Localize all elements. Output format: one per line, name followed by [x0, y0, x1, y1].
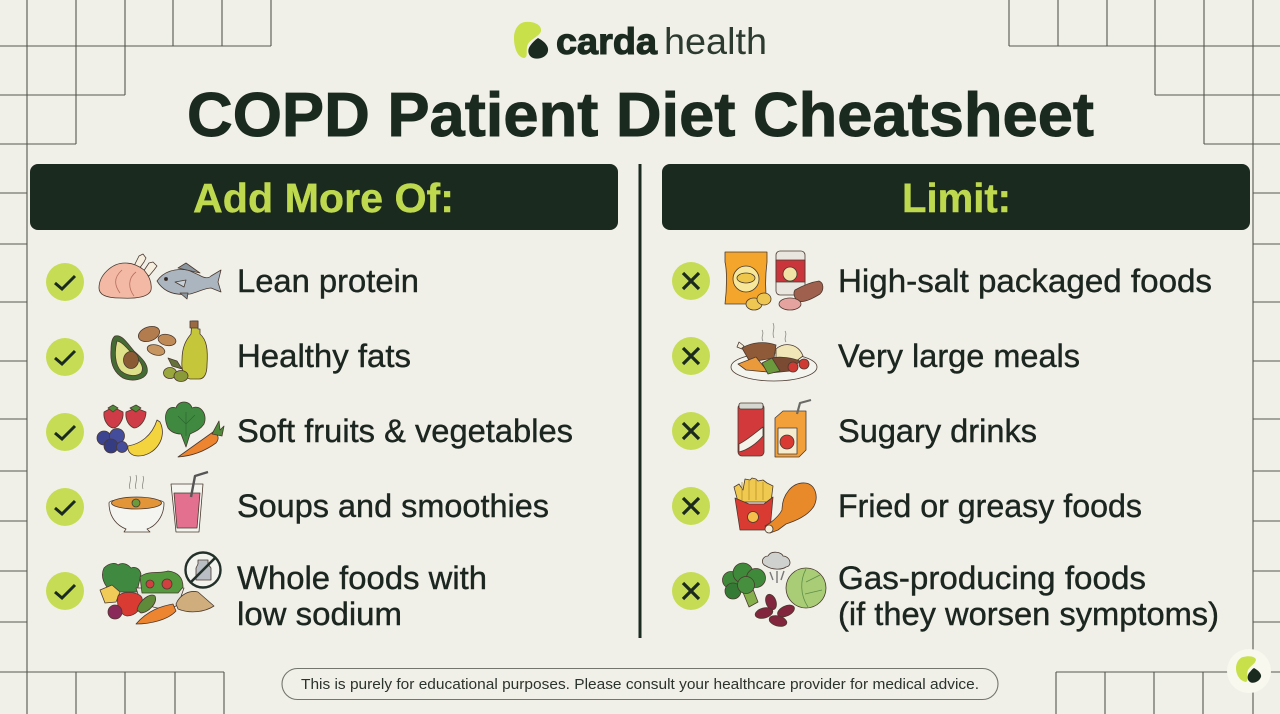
row: lean protein: Lean protein — [237, 263, 419, 299]
panel: limit — [672, 251, 1219, 632]
text: gas-producing foods: Gas-producing foods — [838, 560, 1146, 596]
center divider — [638, 164, 642, 638]
panel header: Limit — [662, 164, 1250, 230]
icon: broccoli, gas cloud, cabbage and beans — [722, 552, 826, 628]
row: soups and smoothies — [46, 472, 549, 532]
row: sugary drinks — [672, 400, 1037, 457]
corner logo — [1227, 649, 1271, 693]
icon: soup and smoothie — [109, 472, 208, 532]
row: fried or greasy foods: Fried or greasy foods — [838, 488, 1142, 524]
row: high-salt packaged foods — [672, 251, 1212, 310]
panel header: Add More Of — [30, 164, 618, 230]
text: gas-producing foods — [838, 560, 1219, 632]
row: fried or greasy foods — [672, 478, 1142, 533]
logo: carda health: carda — [556, 21, 657, 62]
row: soft fruits and vegetables: Soft fruits & vegetables — [237, 413, 573, 449]
row: sugary drinks: Sugary drinks — [838, 413, 1037, 449]
footer disclaimer: This is purely for educational purposes. Please consult your healthcare provider for medical advice. — [301, 676, 979, 693]
text: whole foods with low sodium: low sodium — [237, 596, 402, 632]
footer disclaimer — [282, 668, 998, 700]
row: very large meals — [672, 323, 1080, 381]
row: lean protein — [46, 254, 419, 301]
panel: add more of — [46, 254, 573, 632]
icon: soda can and juice box — [738, 400, 811, 457]
icon: large plate of food — [731, 323, 817, 381]
logo: carda health: health — [664, 21, 767, 62]
icon: chips, canned soup and sausage — [725, 251, 823, 310]
row: healthy fats — [46, 321, 411, 382]
icon: berries, banana, spinach and carrot — [97, 402, 224, 457]
panel header: Add More Of: Add More Of: — [193, 175, 454, 221]
row: healthy fats: Healthy fats — [237, 338, 411, 374]
icon: chicken and fish — [99, 254, 221, 299]
row: gas-producing foods — [672, 552, 1219, 632]
row: very large meals: Very large meals — [838, 338, 1080, 374]
title: COPD Patient Diet Cheatsheet — [187, 81, 1094, 150]
icon: fries and fried drumstick — [734, 478, 816, 533]
text: gas-producing foods: (if they worsen symptoms) — [838, 596, 1219, 632]
logo: carda health — [514, 21, 767, 62]
row: whole foods with low sodium — [46, 552, 487, 632]
row: soups and smoothies: Soups and smoothies — [237, 488, 549, 524]
text: whole foods with low sodium: Whole foods with — [237, 560, 487, 596]
icon: avocado, nuts and olive oil — [111, 321, 207, 382]
panel header: Limit: Limit: — [902, 175, 1011, 221]
row: high-salt packaged foods: High-salt packaged foods — [838, 263, 1212, 299]
text: whole foods with low sodium — [237, 560, 487, 632]
row: soft fruits and vegetables — [46, 402, 573, 457]
icon: whole foods and no salt — [100, 552, 220, 624]
